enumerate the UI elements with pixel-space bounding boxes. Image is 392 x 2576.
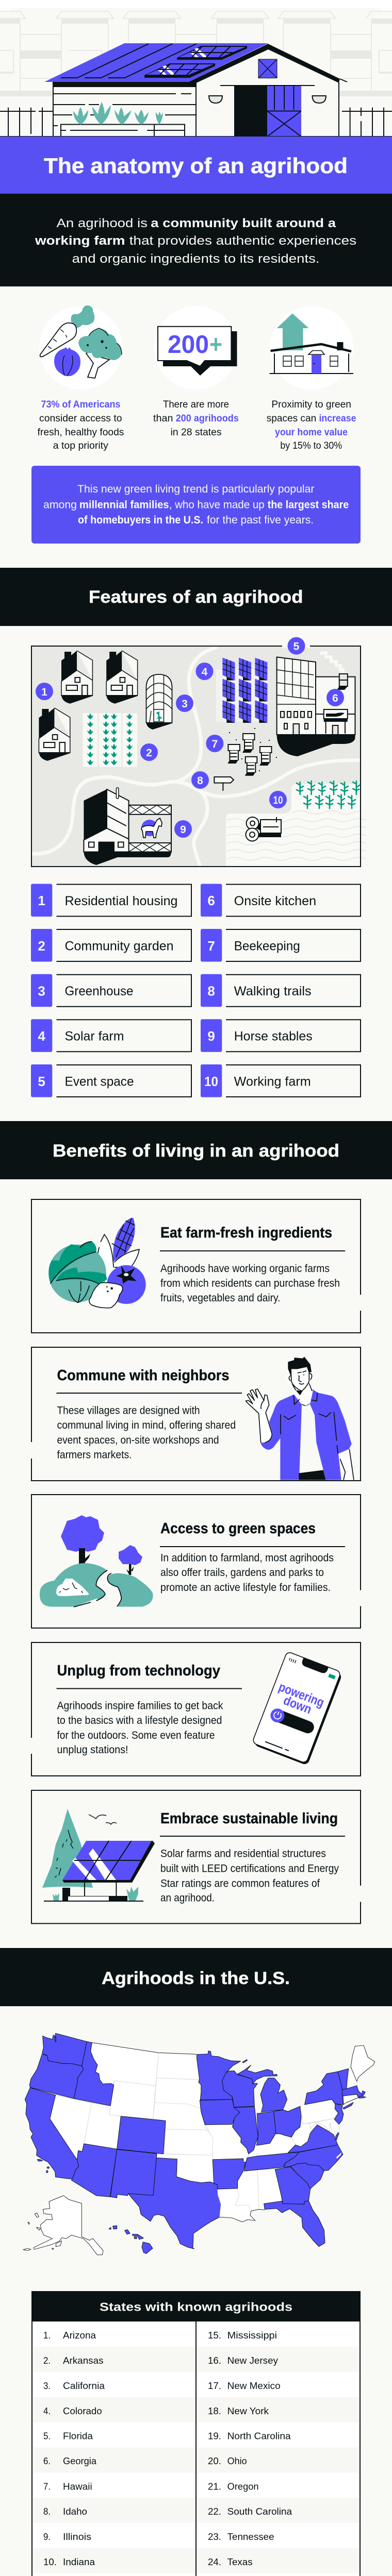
stat: home value: by 15% to 30% [280,440,342,451]
western states [23,2033,221,2255]
stat: fresh foods: a top priority [53,440,108,451]
left column: Georgia [63,2456,97,2466]
left column: California [63,2381,105,2391]
left column: 1. [43,2330,51,2341]
right column: New York [227,2406,269,2416]
barn side wall [53,82,196,137]
callout: millennial families: This new green living trend is particularly popular [77,483,315,495]
left column: 3. [43,2381,51,2391]
icon: house with arrow [269,313,353,374]
stat: home value: your home value [275,427,348,438]
callout: millennial families: among [43,499,77,511]
right column: New Jersey [227,2355,278,2366]
right column: Ohio [227,2456,247,2466]
icon: phone: powering [276,1680,326,1710]
map legend: Event space [65,1075,134,1089]
right column: North Carolina [227,2431,291,2441]
left column [43,2330,130,2576]
right column: 23. [208,2532,221,2542]
map legend: Solar farm [65,1029,124,1044]
left column: 2. [43,2355,51,2366]
right column: 21. [208,2481,221,2492]
map legend: 4 [38,1028,45,1044]
gable wall [196,49,339,137]
icon: vegetables [40,306,122,378]
panel: commune with neighbors [30,1347,361,1481]
panel: commune with neighbors: event spaces, on-site workshops and [57,1434,219,1446]
right column: 22. [208,2506,221,2517]
title band [0,137,392,194]
map legend: Walking trails [234,984,312,998]
panel: access to green spaces [31,1495,362,1628]
right column: Texas [227,2557,253,2567]
icon: trees and hills [40,1515,153,1607]
left column: 9. [43,2532,51,2542]
map legend: 9 [207,1028,215,1044]
map markers [36,637,344,838]
map markers: 5 [293,641,300,653]
map legend: Horse stables [234,1029,313,1044]
left column: 8. [43,2506,51,2517]
panel: agrihood map [31,637,366,867]
map markers: 7 [212,738,218,750]
stat: fresh foods [38,306,124,451]
heading band: agrihoods in the U.S. [0,1948,392,2006]
alaska [23,2196,103,2255]
panel: embrace sustainable living: built with LEED certifications and Energy [160,1863,339,1874]
card heading: Eat farm-fresh ingredients [160,1225,332,1241]
panel: unplug from technology [30,1642,361,1776]
right column: 19. [208,2431,221,2441]
map legend: Greenhouse [65,984,133,998]
heading band: benefits: Benefits of living in an agrihood [53,1141,339,1161]
left column: 4. [43,2406,51,2416]
callout: millennial families: for the past five years. [207,514,314,526]
left column: Idaho [63,2506,87,2517]
eastern states [197,2045,375,2247]
callout: millennial families: of homebuyers in the U.S. [78,514,203,526]
card text: Solar farms and residential structures [160,1848,326,1860]
map legend: 8 [207,983,215,998]
map legend: 6 [207,893,215,908]
right column: South Carolina [227,2506,292,2517]
left column: 10. [43,2557,57,2567]
farm crops [297,781,360,808]
panel: unplug from technology: unplug stations! [57,1744,128,1756]
intro panel: that provides authentic experiences [129,234,356,248]
intro panel: and organic ingredients to its residents. [72,252,320,266]
panel: eat farm-fresh ingredients [31,1199,362,1333]
icon: solar panel and tree [42,1809,155,1901]
left column: Arkansas [63,2355,103,2366]
stat: 200 agrihoods [153,306,239,438]
stat: 200 agrihoods: in 28 states [171,427,222,438]
stat text: Proximity to green [271,399,351,410]
heading band: benefits [0,1121,392,1179]
callout: millennial families [31,466,361,544]
map legend: 10 [204,1074,218,1089]
event space and kitchen building [277,653,355,756]
map markers: 8 [197,775,203,787]
right column: 15. [208,2330,221,2341]
panel: eat farm-fresh ingredients: fruits, vegetables and dairy. [160,1292,281,1304]
intro panel: a community built around a [151,216,336,230]
fence [0,108,392,137]
left column: Hawaii [63,2481,92,2492]
callout: millennial families: the largest share [268,499,349,511]
map legend: Onsite kitchen [234,894,316,908]
right column: Tennessee [227,2532,274,2542]
stat: 200 agrihoods: than [153,413,173,424]
community garden [83,713,137,767]
horse [141,818,162,838]
right column [208,2330,292,2576]
map markers: 6 [332,692,338,704]
illustration: faint townhouse backdrop [0,11,392,96]
map legend: Community garden [65,939,173,953]
planter plants [73,102,163,125]
greenhouse [146,674,172,730]
right column: 20. [208,2456,221,2466]
map legend: 3 [38,983,45,998]
map markers: 10 [273,794,283,806]
intro panel: An agrihood is [57,216,148,230]
panel: access to green spaces: promote an active lifestyle for families. [160,1582,331,1594]
map markers: 9 [180,824,186,836]
farm field [226,784,366,866]
left column: Indiana [63,2557,95,2567]
icon: speech bubble [158,327,237,376]
left column: Arizona [63,2330,96,2341]
right column: Mississippi [227,2330,277,2341]
map legend: 5 [38,1074,45,1089]
map legend: 1 [38,893,45,908]
right column: 18. [208,2406,221,2416]
beehives [227,728,277,776]
right column: 24. [208,2557,221,2567]
map markers: 2 [146,747,152,759]
heading band: agrihoods in the U.S.: Agrihoods in the U.S. [102,1969,290,1988]
card text: Agrihoods inspire families to get back [57,1700,223,1712]
solar farm [216,657,268,723]
walking paths [31,647,360,866]
map legend: Residential housing [65,894,177,908]
title: The anatomy of an agrihood [44,154,348,178]
left column: 6. [43,2456,51,2466]
icon: farm produce [48,1218,146,1308]
card heading: Embrace sustainable living [160,1810,338,1827]
hawaii [109,2226,153,2253]
stat text: There are more [163,399,229,410]
panel: commune with neighbors: communal living in mind, offering shared [57,1419,236,1431]
residential houses [39,651,138,761]
map markers: 4 [202,666,208,678]
map legend: Working farm [234,1075,311,1089]
lamps [209,96,222,103]
panel: access to green spaces: also offer trails, gardens and parks to [160,1567,324,1579]
left column: Illinois [63,2532,91,2542]
left column: Florida [63,2431,93,2441]
panel: unplug from technology: to the basics with a lifestyle designed [57,1715,222,1726]
table heading: States with known agrihoods [100,2300,292,2313]
icon: speech bubble: 200 [168,331,209,359]
callout: millennial families: millennial families [79,499,169,511]
panel: unplug from technology: for the outdoors. Some even feature [57,1730,215,1741]
planter box [61,125,185,137]
map legend: 7 [207,938,215,954]
panel: commune with neighbors: farmers markets. [57,1449,132,1461]
callout: millennial families: , who have made up [169,499,265,511]
map markers: 1 [41,686,47,698]
card heading: Access to green spaces [160,1520,316,1537]
loft window [258,59,277,78]
farm tractor [246,817,281,841]
stat: home value: increase [319,413,356,424]
stat: fresh foods: fresh, healthy foods [38,427,124,438]
map legend: 2 [38,938,45,954]
stat: 200 agrihoods: 200 agrihoods [176,413,239,424]
stat text: 73% of Americans [41,399,121,410]
panel: eat farm-fresh ingredients: from which residents can purchase fresh [160,1278,340,1290]
card heading: Commune with neighbors [57,1367,229,1384]
map: agrihoods by state [23,2033,375,2255]
card heading: Unplug from technology [57,1663,220,1679]
illustration: barn [0,43,392,137]
illustration: waving man [246,1357,354,1480]
panel: embrace sustainable living: Star ratings are common features of [160,1877,320,1890]
heading band: features [0,568,392,626]
card text: These villages are designed with [57,1404,200,1416]
icon: phone: down [282,1693,314,1717]
card text: Agrihoods have working organic farms [160,1263,330,1275]
right column: Oregon [227,2481,259,2492]
map markers: 3 [182,698,188,710]
stat: home value: spaces can [267,413,316,424]
right column: 17. [208,2381,221,2391]
left column: 7. [43,2481,51,2492]
roof [44,43,268,82]
left column: Colorado [63,2406,102,2416]
heading band: features: Features of an agrihood [89,587,303,607]
trail sign [214,777,234,791]
table: states with known agrihoods [31,2291,361,2576]
right column: New Mexico [227,2381,281,2391]
stat: fresh foods: consider access to [39,413,122,424]
panel: embrace sustainable living: an agrihood. [160,1892,215,1904]
icon: speech bubble: + [209,331,222,359]
horse stables [84,788,171,865]
stat: home value [267,306,356,451]
intro panel: working farm [35,234,125,248]
intro panel [0,194,392,286]
right column: 16. [208,2355,221,2366]
roof solar panels [177,46,247,60]
card text: In addition to farmland, most agrihoods [160,1552,334,1564]
panel: embrace sustainable living [31,1790,362,1924]
left column: 5. [43,2431,51,2441]
barn door [220,86,315,137]
icon: phone [252,1651,343,1766]
map legend [31,884,361,1097]
map legend: Beekeeping [234,939,300,953]
